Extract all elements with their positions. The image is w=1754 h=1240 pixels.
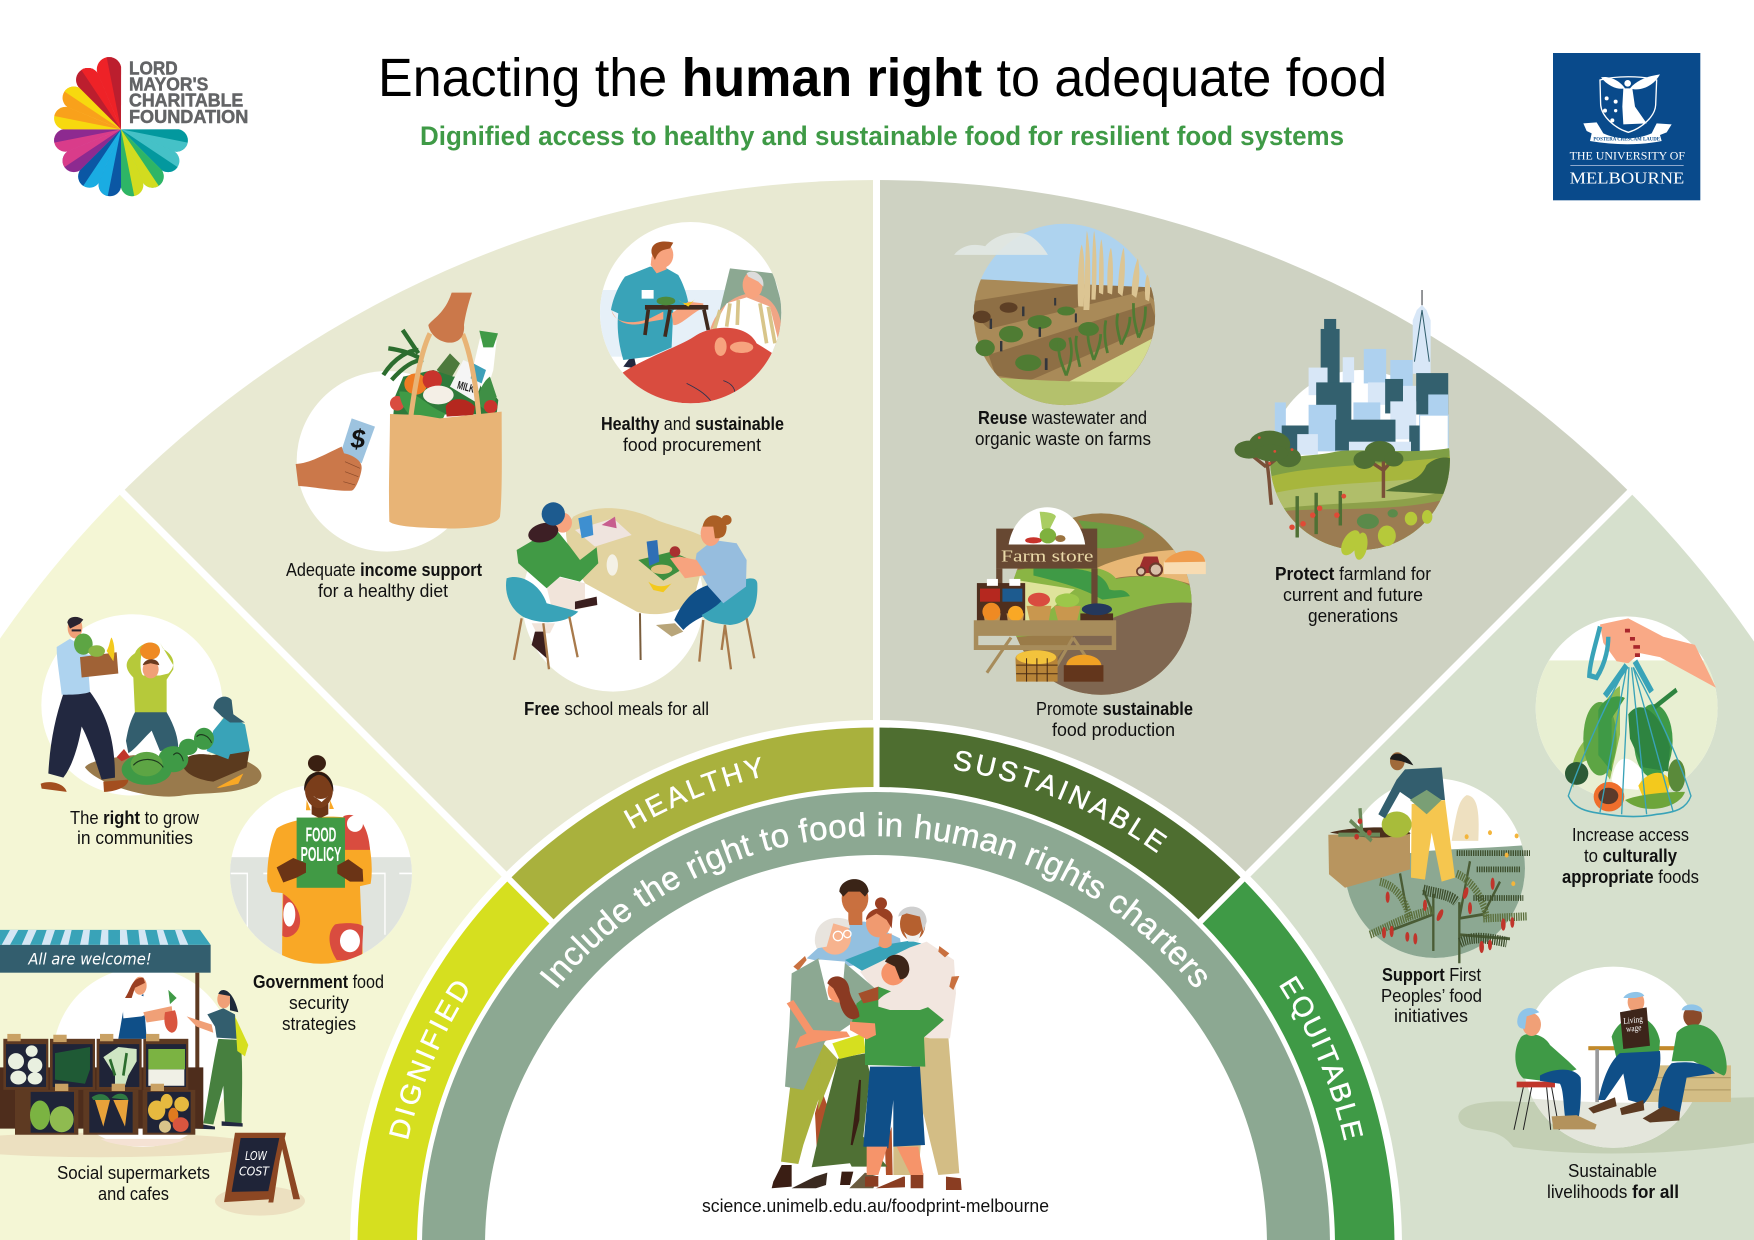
caption: culturally appropriate [1562,824,1699,887]
caption: first peoples: Peoples’ food [1381,985,1482,1006]
panel: healthy sector background [122,180,876,1240]
illustrations: equitable sector [1328,616,1754,1154]
logo: University of Melbourne: MELBOURNE [1570,169,1684,188]
caption: first peoples [1381,964,1482,1026]
panel: sustainable sector background [876,180,1630,1240]
caption: procurement [601,413,784,455]
caption: procurement: Healthy and sustainable [601,413,784,434]
caption: sustainable production: food production [1052,719,1175,740]
caption: culturally appropriate: appropriate foods [1562,866,1699,887]
caption: procurement: food procurement [623,434,761,455]
caption: school meals: Free school meals for all [524,698,709,719]
panel: dignified sector background [0,492,870,1240]
ring text: include the right to food: Include the right to food in human rights charters [540,812,1207,988]
logo: Lord Mayor's Charitable Foundation [52,55,248,198]
caption: livelihoods: Sustainable [1568,1160,1657,1181]
caption: protect farmland: Protect farmland for [1275,563,1431,584]
caption: income support: for a healthy diet [318,580,448,601]
ring segment: dignified [358,879,870,1240]
icon: workers discussing living wage: Living [1623,1014,1643,1026]
label: SUSTAINABLE: SUSTAINABLE [954,750,1168,853]
caption: government strategies [253,971,384,1034]
caption: protect farmland: generations [1308,605,1398,626]
icon: workers discussing living wage: wage [1626,1022,1642,1034]
caption: sustainable production: Promote sustainable [1036,698,1193,719]
caption: government strategies: Government food [253,971,384,992]
caption: livelihoods [1547,1160,1679,1202]
icon: woman holding food policy document [227,755,417,967]
caption: right to grow: The right to grow [70,807,200,828]
caption: income support: Adequate income support [286,559,482,580]
icon: social supermarket stall [0,930,257,1157]
caption: protect farmland [1275,563,1431,626]
ring segment: equitable [882,879,1394,1240]
icon: community gardeners [41,614,261,797]
caption: culturally appropriate: Increase access [1572,824,1689,845]
caption: right to grow [70,807,200,848]
title: Enacting the human right to adequate food [378,48,1387,108]
caption: culturally appropriate: to culturally [1584,845,1678,866]
icon: person tending First Peoples garden [1328,752,1530,967]
caption: income support [286,559,482,601]
icon: low cost chalkboard sign: COST [239,1165,270,1179]
caption: social supermarkets: Social supermarkets [57,1162,210,1183]
logo: Lord Mayor's Charitable Foundation: FOUNDATION [129,106,248,127]
caption: reuse: Reuse wastewater and [978,407,1147,428]
logo: Lord Mayor's Charitable Foundation: LORD [129,57,178,78]
caption: government strategies: security [289,992,350,1013]
caption: social supermarkets [57,1162,210,1204]
illustrations: healthy sector [296,222,783,692]
caption: first peoples: Support First [1382,964,1481,985]
caption: sustainable production [1036,698,1193,740]
icon: hand carrying string bag of food [1533,616,1720,817]
icon: farm reusing water [954,220,1158,410]
icon: social supermarket stall: All are welcome! [27,951,152,969]
icon: nurse serving patient in bed [600,222,783,403]
ring segment: healthy [509,728,876,1240]
caption: social supermarkets: and cafes [98,1183,169,1204]
icon: woman holding food policy document: FOOD [306,823,336,846]
logo: Lord Mayor's Charitable Foundation: MAYOR'S [129,74,208,95]
logo: University of Melbourne: THE UNIVERSITY OF [1570,148,1685,162]
illustrations: dignified sector [0,614,417,1216]
ring segment: sustainable [876,728,1243,1240]
illustrations: sustainable sector [954,220,1451,700]
logo: University of Melbourne [1553,53,1700,200]
url: science.unimelb.edu.au/foodprint-melbourne [702,1195,1049,1216]
logo: Lord Mayor's Charitable Foundation: CHARITABLE [129,90,243,111]
subtitle: Dignified access to healthy and sustainable food for resilient food systems [420,121,1344,151]
icon: farm store and sustainable production [974,507,1206,700]
caption: protect farmland: current and future [1283,584,1423,605]
panel: equitable sector background [882,492,1754,1240]
icon: hand with money: $ [350,424,366,454]
icon: woman holding food policy document: POLICY [301,843,342,866]
icon: low cost chalkboard sign: LOW [245,1149,268,1163]
label: HEALTHY: HEALTHY [624,756,760,829]
icon: city and protected farmland [1234,290,1451,561]
caption: reuse [975,407,1151,449]
caption: livelihoods: livelihoods for all [1547,1181,1679,1202]
icon: shopping bag with vegetables: MILK [456,380,476,396]
caption: right to grow: in communities [77,827,193,848]
label: DIGNIFIED: DIGNIFIED [389,981,468,1139]
caption: first peoples: initiatives [1394,1005,1468,1026]
label: EQUITABLE: EQUITABLE [1279,976,1364,1140]
logo: University of Melbourne: POSTERA CRESCAM LAUDE [1593,138,1661,143]
icon: shopping bag with vegetables [383,293,502,528]
caption: reuse: organic waste on farms [975,428,1151,449]
illustration: family embracing [772,879,962,1190]
icon: farm store and sustainable production: Farm store [1001,547,1094,566]
caption: government strategies: strategies [282,1013,356,1034]
inner ring: human rights charters [422,792,1330,1240]
icon: workers discussing living wage [1458,967,1754,1154]
icon: children eating school meals [506,502,757,692]
icon: low cost chalkboard sign [215,1133,305,1216]
icon: hand with money [296,371,477,552]
